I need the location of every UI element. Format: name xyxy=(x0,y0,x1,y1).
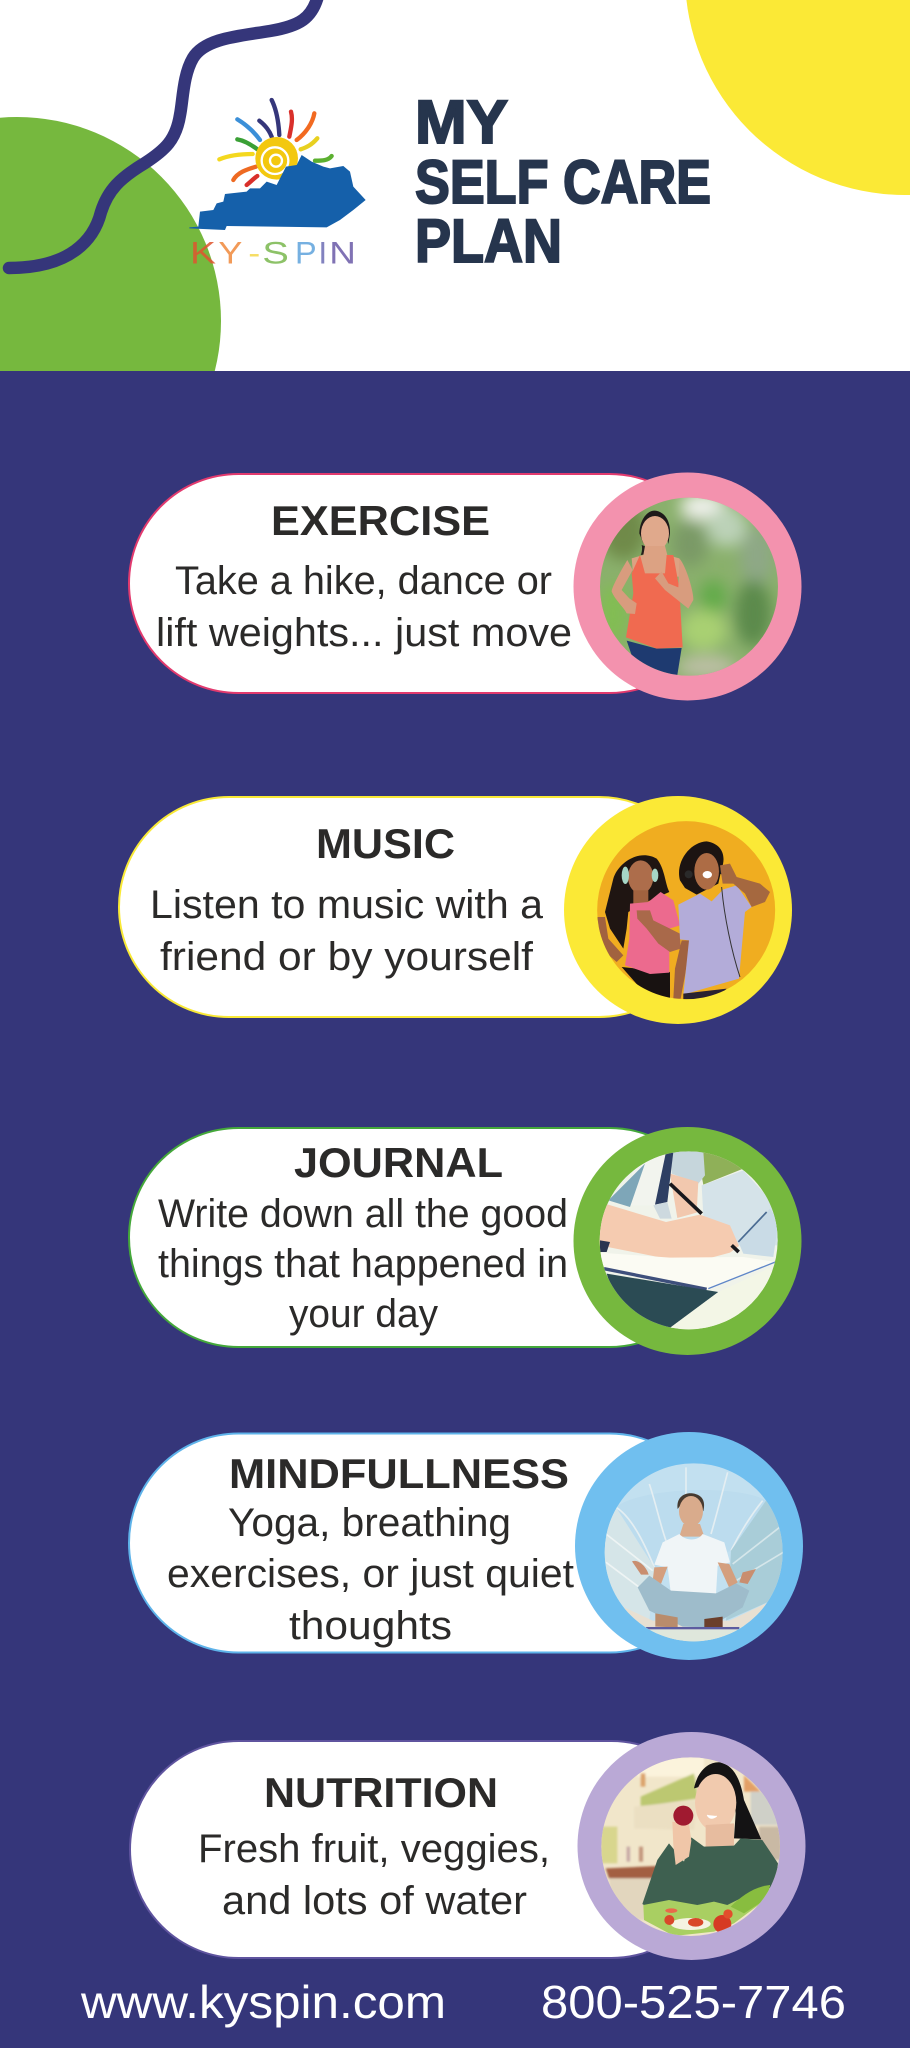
text: mindfulness: Yoga, breathing xyxy=(228,1501,511,1545)
footer: website: www.kyspin.com xyxy=(80,1976,446,2028)
title: MY xyxy=(415,88,508,156)
photo: woman jogging xyxy=(597,493,783,678)
ring: pink xyxy=(574,472,802,700)
logo wordmark: I xyxy=(318,234,327,270)
title: SELF CARE xyxy=(415,148,711,216)
ring: green xyxy=(574,1127,802,1355)
card: journal xyxy=(129,1128,719,1347)
logo wordmark: N xyxy=(329,234,356,270)
heading: music: MUSIC xyxy=(316,820,455,867)
card: exercise xyxy=(129,474,719,693)
logo wordmark xyxy=(190,234,356,270)
text: mindfulness: thoughts xyxy=(289,1604,452,1648)
text: journal: your day xyxy=(289,1292,438,1336)
logo wordmark: S xyxy=(262,234,289,270)
card: mindfulness xyxy=(129,1434,719,1652)
heading: journal: JOURNAL xyxy=(294,1139,503,1186)
panel: music xyxy=(119,796,792,1024)
text: music xyxy=(150,883,543,979)
text: music: friend or by yourself xyxy=(160,935,534,979)
panel: mindfulness xyxy=(129,1432,803,1660)
panel: exercise xyxy=(129,472,802,700)
logo wordmark: - xyxy=(248,234,260,270)
photo: writing in a journal xyxy=(597,1149,780,1332)
text: music: Listen to music with a xyxy=(150,883,543,927)
text: nutrition xyxy=(198,1827,550,1923)
ring: purple xyxy=(578,1732,806,1960)
text: mindfulness xyxy=(167,1501,574,1648)
heading: nutrition: NUTRITION xyxy=(264,1769,498,1816)
panel: journal xyxy=(129,1127,802,1355)
text: nutrition: and lots of water xyxy=(222,1879,527,1923)
photo: man meditating xyxy=(603,1461,786,1644)
footer: phone: 800-525-7746 xyxy=(541,1976,846,2028)
logo sun rays xyxy=(219,100,332,185)
text: exercise: lift weights... just move xyxy=(156,611,572,655)
heading: exercise: EXERCISE xyxy=(271,497,490,544)
green circle xyxy=(0,117,221,525)
title: PLAN xyxy=(415,207,562,275)
photo: woman with apple and salad xyxy=(599,1755,782,1938)
text: nutrition: Fresh fruit, veggies, xyxy=(198,1827,550,1871)
text: mindfulness: exercises, or just quiet xyxy=(167,1552,574,1596)
text: journal xyxy=(158,1192,568,1336)
logo wordmark: K xyxy=(190,234,216,270)
card: music xyxy=(119,797,709,1017)
logo sun xyxy=(255,137,298,180)
text: journal: things that happened in xyxy=(158,1242,568,1286)
logo wordmark: Y xyxy=(218,234,242,270)
logo: KY-SPIN xyxy=(189,100,366,270)
text: exercise xyxy=(156,559,572,655)
photo: friends listening to music xyxy=(595,819,778,1002)
title xyxy=(415,88,711,275)
wavy line xyxy=(9,0,318,268)
text: exercise: Take a hike, dance or xyxy=(175,559,552,603)
heading: mindfulness: MINDFULLNESS xyxy=(229,1450,569,1497)
yellow circle xyxy=(685,0,910,195)
card: nutrition xyxy=(130,1741,720,1958)
ring: yellow xyxy=(564,796,792,1024)
ring: blue xyxy=(575,1432,803,1660)
text: journal: Write down all the good xyxy=(158,1192,568,1236)
logo wordmark: P xyxy=(295,234,317,270)
panel: nutrition xyxy=(130,1732,806,1960)
header background xyxy=(0,0,910,371)
logo Kentucky map xyxy=(189,155,366,230)
